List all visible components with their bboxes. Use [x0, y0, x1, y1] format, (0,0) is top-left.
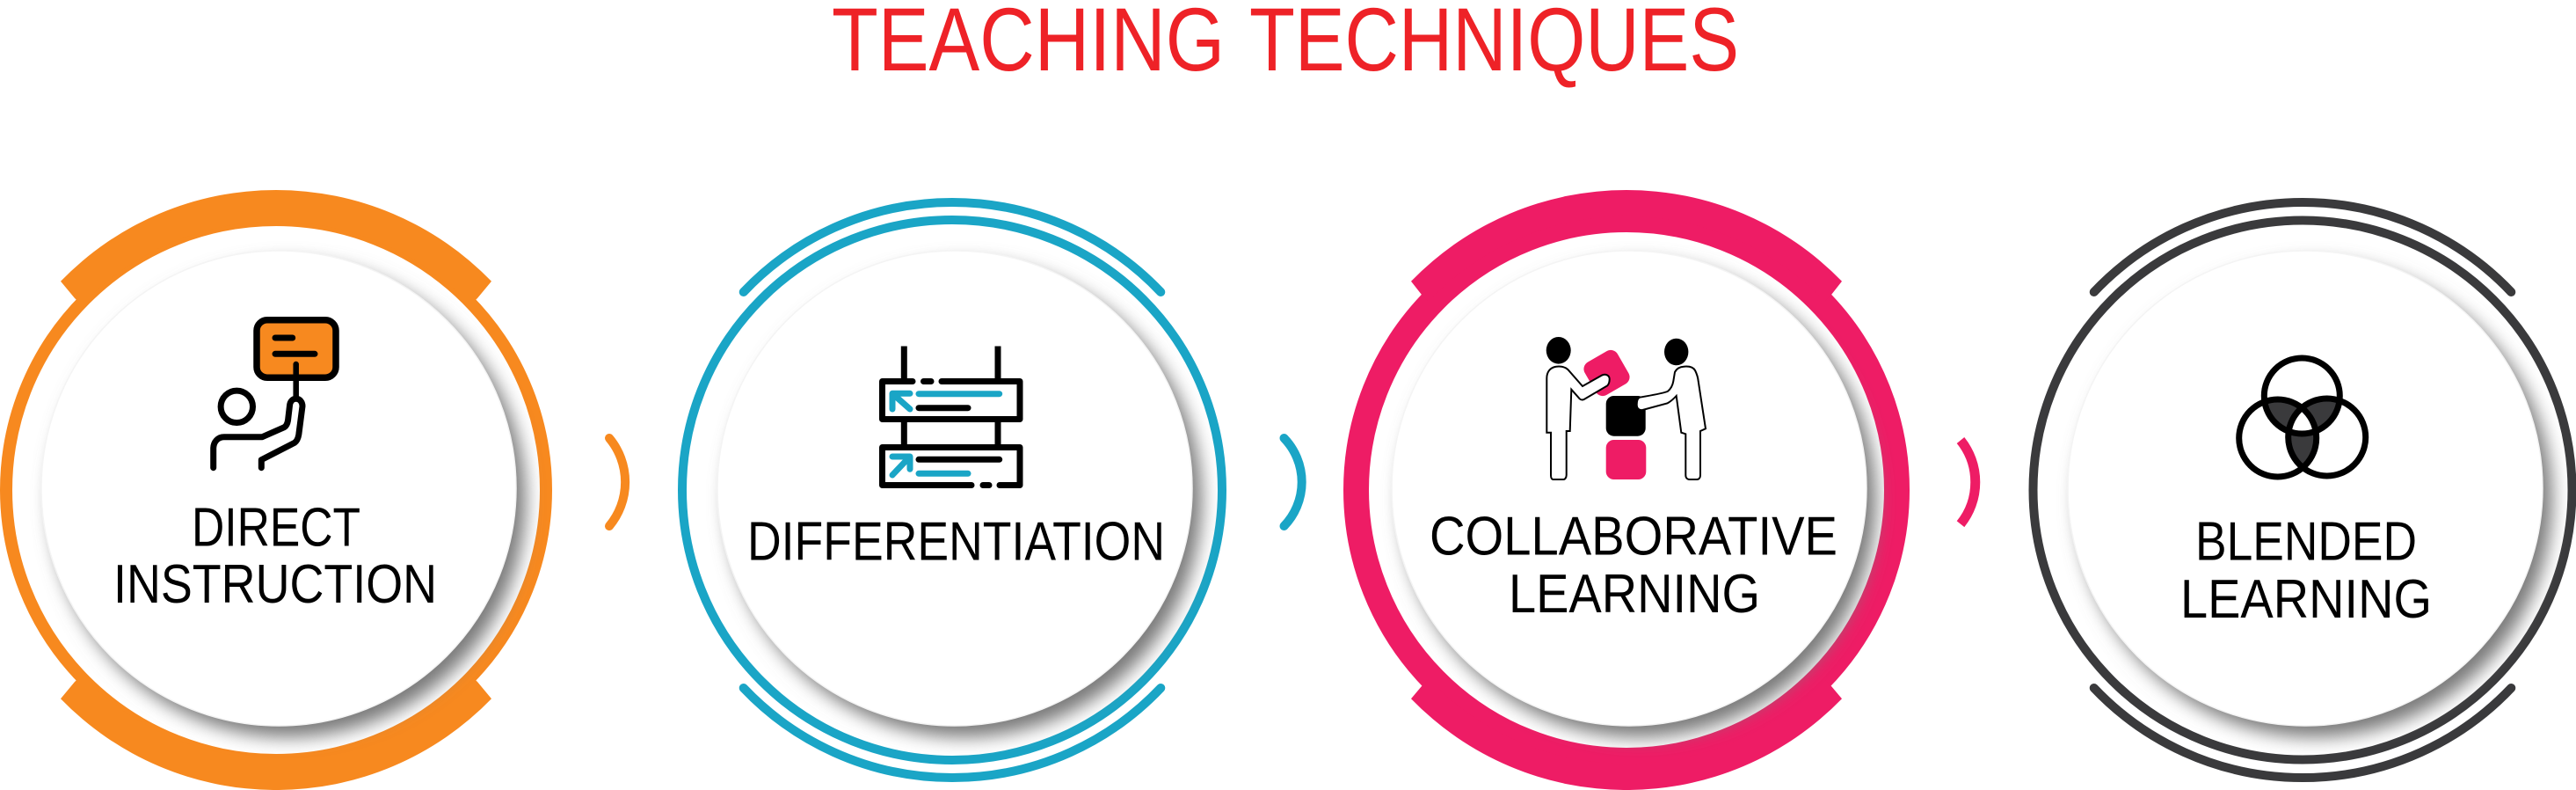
label: blended learning: BLENDED [2195, 510, 2417, 572]
panel: direct instruction [6, 190, 546, 790]
disc shadow [727, 262, 1202, 737]
dark ring [2033, 220, 2572, 760]
label: differentiation: DIFFERENTIATION [747, 510, 1165, 572]
icon: signpost with arrows [883, 347, 1020, 486]
label: blended learning: LEARNING [2180, 568, 2432, 630]
orange ring [6, 220, 546, 760]
icon: two people stacking blocks [1546, 337, 1706, 479]
panel: collaborative learning [1356, 190, 1897, 790]
white disc [41, 251, 516, 726]
label: blended learning [2180, 510, 2432, 630]
teal ring [682, 220, 1222, 760]
label: direct instruction: INSTRUCTION [113, 553, 437, 615]
white disc [2068, 251, 2543, 726]
pink bottom band [1411, 679, 1842, 790]
orange bottom band [61, 676, 491, 790]
dark top arc [2094, 202, 2511, 292]
label: collaborative learning [1430, 505, 1837, 625]
teal top arc [744, 202, 1161, 292]
dark bottom arc [2094, 688, 2511, 778]
icon: venn diagram [2239, 358, 2366, 477]
title [832, 0, 1739, 90]
connector arc: pink [1961, 440, 1976, 524]
disc shadow [51, 262, 526, 737]
panel: differentiation [682, 202, 1222, 778]
connector arc: orange [609, 438, 625, 526]
white disc [717, 251, 1192, 726]
orange top band [61, 190, 491, 304]
label: direct instruction: DIRECT [192, 496, 360, 558]
pink ring [1356, 220, 1897, 760]
label: collaborative learning: COLLABORATIVE [1430, 505, 1837, 567]
teal bottom arc [744, 688, 1161, 778]
pink top band [1411, 190, 1842, 301]
disc shadow [2078, 262, 2552, 737]
label: collaborative learning: LEARNING [1509, 563, 1760, 625]
connector arc: teal [1284, 438, 1302, 526]
panel: blended learning [2033, 202, 2572, 778]
disc shadow [1401, 262, 1876, 737]
white disc [1392, 251, 1867, 726]
label: direct instruction [113, 496, 437, 615]
icon: teacher pointing at board [214, 320, 336, 468]
